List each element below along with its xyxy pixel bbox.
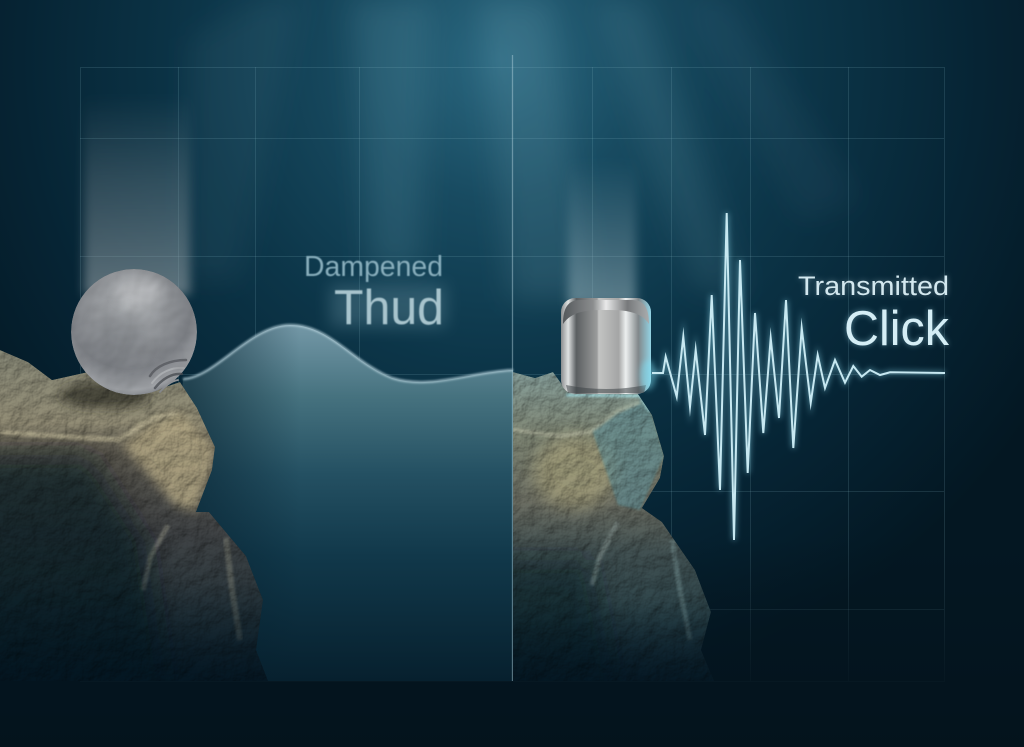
label: Transmitted Click: Click (844, 302, 949, 356)
center divider line (512, 55, 514, 681)
light column above ball (84, 95, 190, 295)
label: Transmitted Click: Click (844, 302, 949, 356)
dent creases at impact point (150, 360, 186, 392)
bottom floor shading (0, 540, 1024, 747)
rock: right cliff (513, 372, 711, 681)
label: Transmitted Click (798, 271, 949, 356)
icon: dented metal ball (71, 269, 197, 395)
panel: transmitted click (right) (513, 178, 950, 681)
label: Transmitted Click: Transmitted (798, 271, 949, 301)
label: Dampened Thud: Dampened (304, 251, 443, 283)
wave: absorbed energy swell (180, 320, 513, 681)
panel: dampened thud (left) (0, 95, 513, 710)
icon: steel cylinder (561, 298, 656, 394)
reference grid (80, 67, 944, 682)
chart: sharp click waveform (652, 213, 945, 540)
label: Dampened Thud: Thud (334, 281, 444, 335)
light column above cylinder (568, 160, 636, 305)
label: Transmitted Click: Transmitted (798, 271, 949, 301)
rock: left cliff (0, 350, 268, 681)
light rays from the top (185, 0, 860, 300)
label: Dampened Thud (304, 251, 446, 335)
